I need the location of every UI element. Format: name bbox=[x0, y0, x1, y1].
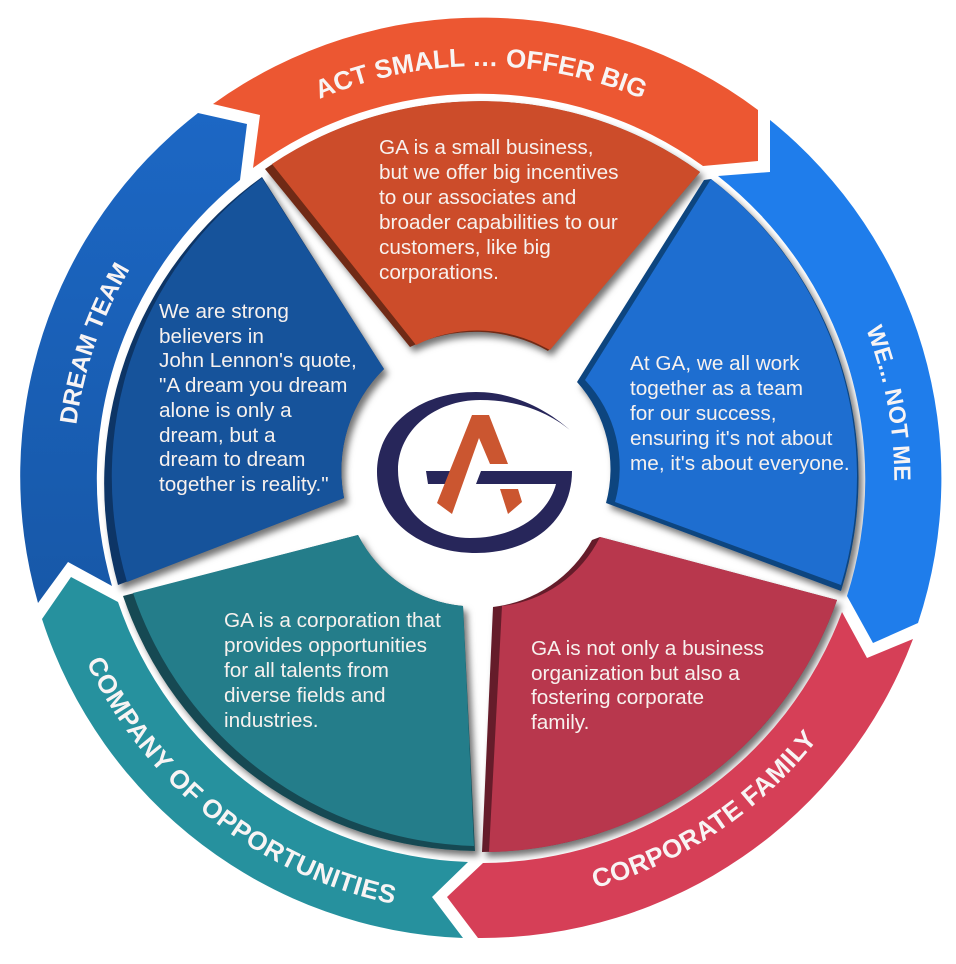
logo: GA bbox=[377, 392, 572, 553]
heading: act small offer big: ACT SMALL … OFFER BIG bbox=[319, 49, 646, 99]
text: company of opportunities description: diverse fields and bbox=[224, 684, 385, 707]
text: dream team description: alone is only a bbox=[159, 399, 292, 422]
text: we not me description: for our success, bbox=[630, 402, 776, 425]
panel: act small offer big bbox=[265, 101, 700, 351]
panel: company of opportunities bbox=[123, 535, 475, 851]
text: we not me description: ensuring it's not about bbox=[630, 427, 833, 450]
text: corporate family description: GA is not only a business bbox=[531, 637, 764, 660]
text: act small description: broader capabilities to our bbox=[379, 211, 618, 234]
heading: corporate family: CORPORATE FAMILY bbox=[592, 728, 814, 886]
text: corporate family description: fostering corporate bbox=[531, 686, 704, 709]
text: corporate family description: family. bbox=[531, 711, 589, 734]
text: company of opportunities description: GA is a corporation that bbox=[224, 609, 441, 632]
text: dream team description: believers in bbox=[159, 325, 264, 348]
text: company of opportunities description: industries. bbox=[224, 709, 319, 732]
text: we not me description: At GA, we all work bbox=[630, 352, 800, 375]
text: act small description: but we offer big incentives bbox=[379, 161, 619, 184]
panel: dream team bbox=[104, 177, 384, 585]
text: act small description: corporations. bbox=[379, 261, 499, 284]
text: act small description: to our associates and bbox=[379, 186, 576, 209]
text: dream team description: We are strong bbox=[159, 300, 289, 323]
text: corporate family description: organization but also a bbox=[531, 662, 740, 685]
text: company of opportunities description: provides opportunities bbox=[224, 634, 427, 657]
text: act small description: GA is a small business, bbox=[379, 136, 594, 159]
heading: dream team: DREAM TEAM bbox=[60, 262, 130, 424]
panel: we not me bbox=[577, 179, 859, 591]
text: act small description: customers, like big bbox=[379, 236, 551, 259]
text: dream team description: dream, but a bbox=[159, 424, 276, 447]
text: we not me description: me, it's about everyone. bbox=[630, 452, 850, 475]
ring segment: act small offer big bbox=[213, 18, 758, 168]
text: dream team description: John Lennon's quote, bbox=[159, 349, 357, 372]
ring segment: we not me bbox=[718, 120, 942, 643]
heading: we not me: WE... NOT ME bbox=[868, 324, 910, 480]
text: we not me description: together as a team bbox=[630, 377, 803, 400]
panel: corporate family bbox=[482, 537, 837, 852]
ring segment: corporate family bbox=[447, 612, 913, 938]
ring segment: dream team bbox=[20, 113, 247, 603]
text: company of opportunities description: for all talents from bbox=[224, 659, 389, 682]
ring segment: company of opportunities bbox=[42, 577, 468, 938]
text: dream team description: dream to dream bbox=[159, 448, 305, 471]
text: dream team description: "A dream you dream bbox=[159, 374, 347, 397]
text: dream team description: together is reality." bbox=[159, 473, 329, 496]
heading: company of opportunities: COMPANY OF OPPORTUNITIES bbox=[89, 658, 396, 903]
